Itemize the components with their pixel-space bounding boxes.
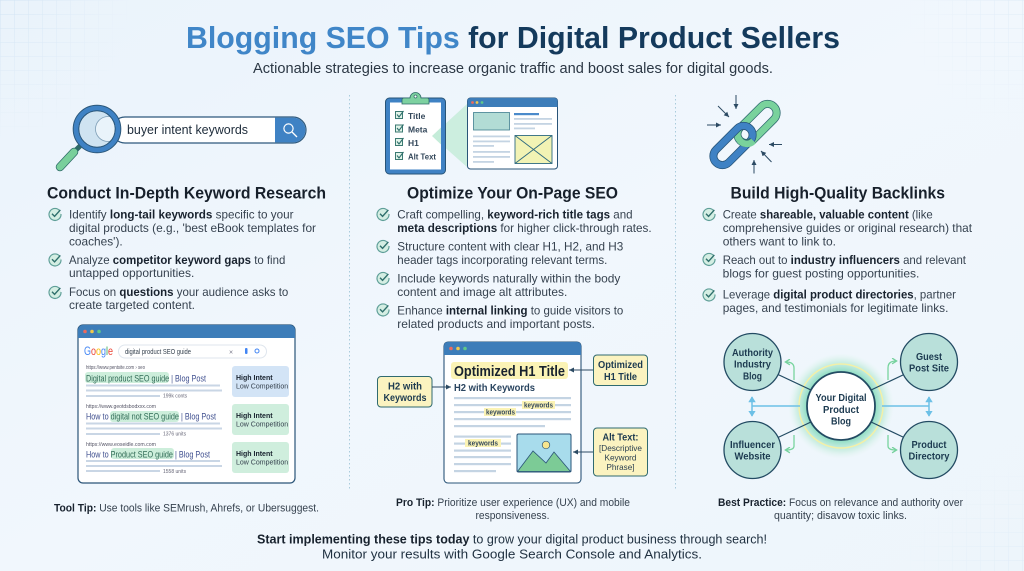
node: guest post site: Post Site	[909, 362, 949, 374]
best practice: quantity; disavow toxic links.	[774, 510, 907, 522]
bullet list: on-page seo: header tags incorporating relevant terms.	[397, 253, 607, 267]
callout: optimized h1 title: H1 Title	[604, 371, 637, 383]
heading: conduct keyword research: Conduct In-Depth Keyword Research	[47, 184, 326, 202]
icon: chain link with arrows	[707, 95, 782, 174]
icon: checklist clipboard to web page: Title	[408, 111, 426, 121]
callout: alt text: Keyword	[604, 452, 637, 462]
icon: checklist clipboard to web page: H1	[408, 138, 419, 148]
search results browser mockup: https://www.eoseidle.com.com	[86, 442, 156, 448]
node: your digital product blog	[807, 372, 875, 440]
callout: h2 with keywords	[378, 376, 451, 407]
bullet list: on-page seo: Structure content with clear H1, H2, and H3	[397, 240, 624, 254]
annotated page mockup: H2 with Keywords	[454, 382, 535, 394]
node: your digital product blog: Your Digital	[816, 392, 867, 404]
callout: alt text: [Descriptive	[599, 443, 642, 453]
bullet list: backlinks: Reach out to industry influencers and relevant	[723, 253, 967, 267]
node: authority industry blog: Authority	[732, 347, 773, 359]
node: guest post site: Guest	[916, 351, 942, 363]
bullet list: keyword research: Analyze competitor keyword gaps to find	[69, 253, 285, 267]
tool tip: Tool Tip: Use tools like SEMrush, Ahrefs, or Ubersuggest.	[54, 502, 319, 514]
node: influencer website	[724, 422, 781, 478]
search results browser mockup: Low Competition	[236, 422, 288, 428]
bullet list: on-page seo: content and image alt attributes.	[397, 285, 567, 299]
footer call to action	[257, 532, 767, 562]
search results browser mockup: 1376 units	[163, 432, 187, 438]
panel: backlinks	[703, 95, 973, 522]
callout: alt text	[573, 428, 648, 476]
annotated page mockup: keywords	[524, 402, 553, 410]
search results browser mockup: How to digital not SEO guide | Blog Post	[86, 412, 216, 422]
search results browser mockup: Google	[84, 344, 113, 358]
callout: alt text: Alt Text:	[602, 432, 638, 444]
bullet list: on-page seo: meta descriptions for higher click-through rates.	[397, 221, 652, 235]
pro tip: Pro Tip: Prioritize user experience (UX) and mobile	[396, 497, 630, 509]
panel: on-page seo	[377, 92, 652, 522]
bullet list: on-page seo: Include keywords naturally within the body	[397, 272, 620, 286]
search results browser mockup: High Intent	[236, 375, 273, 382]
bullet list: backlinks: Create shareable, valuable content (like	[723, 208, 933, 222]
annotated page mockup: Optimized H1 Title	[454, 364, 565, 380]
heading: backlinks: Build High-Quality Backlinks	[730, 184, 945, 202]
bullet list: backlinks: blogs for guest posting opportunities.	[723, 266, 919, 280]
pro tip: responsiveness.	[476, 510, 550, 522]
node: product directory: Product	[912, 439, 947, 451]
annotated page mockup: keywords	[468, 440, 498, 448]
heading: on-page seo: Optimize Your On-Page SEO	[407, 184, 618, 202]
node: authority industry blog: Industry	[734, 358, 771, 370]
callout: optimized h1 title	[569, 355, 648, 386]
panel: keyword research	[47, 105, 326, 514]
node: guest post site	[900, 334, 958, 390]
icon: search bar with magnifier	[60, 105, 306, 167]
bullet list: keyword research	[49, 208, 316, 312]
bullet list: backlinks: Leverage digital product directories, partner	[723, 288, 956, 302]
search results browser mockup: https://www.pentsite.com › seo	[86, 365, 145, 371]
search results browser mockup: High Intent	[236, 413, 273, 420]
icon: checklist clipboard to web page: Alt Text	[408, 152, 436, 162]
bullet list: on-page seo: related products and important posts.	[397, 317, 595, 331]
bullet list: backlinks: comprehensive guides or original research) that	[723, 221, 973, 235]
best practice	[718, 497, 963, 522]
search results browser mockup: Digital product SEO guide | Blog Post	[86, 374, 206, 384]
node: your digital product blog: Blog	[831, 416, 851, 428]
search results browser mockup: High Intent	[236, 451, 273, 458]
subtitle: Actionable strategies to increase organic traffic and boost sales for digital goods.	[253, 61, 773, 77]
node: authority industry blog: Blog	[743, 370, 762, 382]
node: authority industry blog	[724, 334, 781, 390]
bullet list: keyword research: digital products (e.g., 'best eBook templates for	[69, 221, 316, 235]
search results browser mockup: Low Competition	[236, 384, 288, 390]
network diagram	[724, 334, 958, 478]
bullet list: backlinks: others want to link to.	[723, 234, 836, 248]
search results browser mockup: ×	[229, 350, 233, 356]
bullet list: on-page seo	[377, 208, 652, 331]
bullet list: keyword research: coaches').	[69, 234, 123, 248]
footer call to action: Start implementing these tips today to grow your digital product business through search!	[257, 532, 767, 546]
annotated page mockup	[444, 342, 581, 483]
icon: search bar with magnifier: buyer intent keywords	[127, 122, 248, 137]
bullet list: backlinks: pages, and testimonials for legitimate links.	[723, 301, 948, 315]
node: product directory: Directory	[908, 450, 950, 462]
callout: optimized h1 title: Optimized	[598, 359, 643, 371]
annotated page mockup: keywords	[486, 410, 515, 416]
search results browser mockup: How to Product SEO guide | Blog Post	[86, 450, 210, 460]
bullet list: backlinks	[703, 208, 973, 315]
best practice: Best Practice: Focus on relevance and authority over	[718, 497, 963, 509]
pro tip	[396, 497, 630, 522]
icon: checklist clipboard to web page: Meta	[408, 124, 428, 134]
footer call to action: Monitor your results with Google Search Console and Analytics.	[322, 548, 702, 562]
search results browser mockup: digital product SEO guide	[125, 349, 191, 356]
bullet list: keyword research: Identify long-tail keywords specific to your	[69, 208, 294, 222]
callout: h2 with keywords: Keywords	[384, 392, 427, 404]
bullet list: on-page seo: Enhance internal linking to guide visitors to	[397, 304, 624, 318]
bullet list: on-page seo: Craft compelling, keyword-rich title tags and	[397, 208, 633, 222]
node: influencer website: Website	[734, 450, 771, 462]
search results browser mockup: 199k conts	[163, 394, 188, 400]
title: Blogging SEO Tips for Digital Product Sellers	[186, 20, 840, 55]
bullet list: keyword research: create targeted content.	[69, 298, 195, 312]
search results browser mockup: https://www.geotdsbodxxx.com	[86, 404, 156, 410]
icon: checklist clipboard to web page	[386, 92, 558, 174]
search results browser mockup: 1558 units	[163, 469, 187, 475]
node: influencer website: Influencer	[730, 439, 775, 451]
search results browser mockup	[78, 325, 295, 483]
bullet list: keyword research: untapped opportunities.	[69, 266, 194, 280]
callout: h2 with keywords: H2 with	[388, 380, 422, 392]
search results browser mockup: Low Competition	[236, 460, 288, 466]
callout: alt text: Phrase]	[606, 462, 634, 472]
bullet list: keyword research: Focus on questions your audience asks to	[69, 285, 289, 299]
node: your digital product blog: Product	[823, 404, 859, 416]
node: product directory	[900, 422, 958, 478]
